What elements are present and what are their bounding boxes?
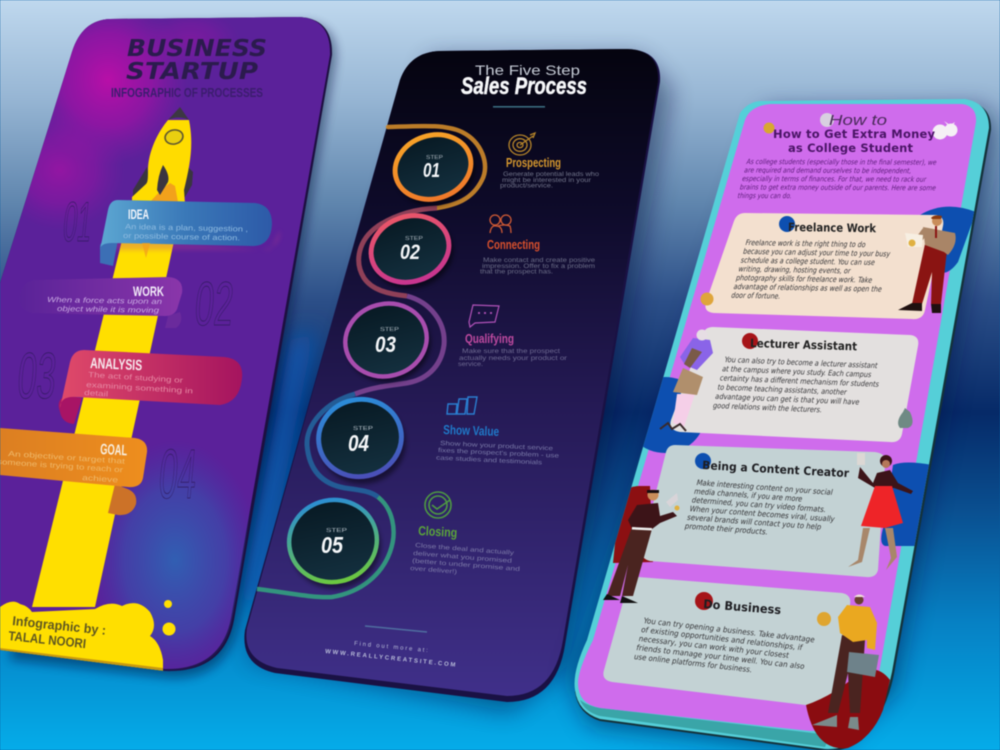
intro paragraph: As college students (especially those in the final semester), we [745,157,938,167]
icon: cloud lower edge [0,648,163,672]
freelance body text: door of fortune. [730,291,782,301]
ribbon: goal: GOAL [100,441,128,459]
lecturer body text: You can also try to become a lecturer assistant [723,355,879,370]
title: The Five Step [475,62,580,78]
prospecting text: Generate potential leads who [503,171,600,178]
show value text [436,422,560,466]
freelance body text: because you can adjust your time to your busy [742,247,892,258]
connector ribbon red [359,208,437,296]
numeral 01: 01 [60,190,95,253]
title rule [493,106,545,108]
credit: TALAL NOORI [8,628,87,651]
card: do business [603,577,850,707]
heading: being a content creator: Being a Content Creator [702,458,850,480]
numeral 03: 03 [15,339,59,412]
step 03: 03 [375,332,396,357]
intro paragraph: especially in terms of finances. For that, we need to rack our [741,174,927,184]
closing text [410,523,521,576]
figure: creator man [603,490,680,603]
do business body text: necessary, you can work with your closest [638,634,790,660]
ribbon: analysis [59,350,242,424]
ribbon: goal: achieve [82,473,118,484]
show value text: Show how your product service [440,440,554,452]
show value text: fixes the prospect's problem - use [438,447,560,460]
icon: smoke cloud [0,602,163,671]
prospecting text: product/service. [500,182,553,190]
ribbon: idea: An idea is a plan, suggestion , [125,222,248,234]
step 04: 04 [348,430,369,456]
connecting text: that the prospect has. [480,268,553,276]
qualifying text: Qualifying [465,331,514,346]
creator body text [684,478,843,541]
card: content creator [641,445,886,577]
connecting text: Connecting [487,237,540,252]
connector ribbon purple [355,296,444,394]
card: freelance work [705,213,943,319]
title: INFOGRAPHIC OF PROCESSES [111,85,263,100]
step 02: 02 [400,241,420,264]
magenta texture [24,18,226,220]
icon: money bag [898,408,913,428]
do business body text: of existing opportunities and relationships, if [640,625,804,652]
icon: money bags [932,121,958,140]
ribbon: analysis: examining something in [86,380,193,396]
freelance body text: advantage of relationships as well as open the [733,282,883,294]
step 03 [337,295,439,392]
title [111,36,267,100]
prospecting text [500,155,600,190]
freelance body text: Freelance work is the right thing to do [744,238,867,249]
figure: businessman [812,594,879,730]
ribbon: work: When a force acts upon an [47,295,162,306]
icon: bars chart [447,397,477,414]
lecturer body text [711,355,885,416]
numeral 02: 02 [192,270,236,339]
qualifying text: actually needs your product or [459,355,567,362]
lecturer body text: advantage you can get is that you will have [714,392,861,407]
lecturer body text: certainty has a different mechanism for students [719,374,880,389]
closing text: over deliver!) [410,565,457,576]
blue blob right [881,462,932,546]
icon: coin [764,122,774,134]
ribbon: idea [100,200,280,266]
ribbon: work [20,277,182,328]
freelance body text: writing, drawing, hosting events, or [737,265,852,275]
closing text: Closing [418,523,458,540]
intro paragraph [737,157,944,201]
icon: chat bubble [469,305,499,327]
icon: coin [817,612,831,626]
ribbon: idea: IDEA [128,206,149,222]
heading: how to get extra money: How to [829,112,887,129]
lecturer body text: good relations with the lecturers. [712,401,823,414]
heading: lecturer assistant: Lecturer Assistant [750,336,858,353]
blue blob top right [920,207,976,273]
ribbon: work: object while it is moving [57,304,160,315]
icon: coin [700,292,714,306]
closing text: (better to under promise and [412,558,521,573]
intro paragraph: brains to get extra money outside of our parents. Here are some [739,183,938,192]
do business body text: friends to manage your time well. You can also [635,643,806,671]
red blob left [613,486,653,563]
creator body text: several brands will contact you to help [686,513,823,532]
ribbon: goal: An objective or target that [8,449,126,466]
creator body text: determined, you can try video formats. [691,496,827,514]
do business body text: You can try opening a business. Take advantage [642,616,816,644]
creator body text: media channels, if you are more [693,487,804,504]
footer text: WWW.REALLYCREATSITE.COM [325,649,456,669]
show value text: Show Value [443,422,499,439]
step 04: STEP [353,426,373,432]
do business body text: use online platforms for business. [633,652,753,674]
qualifying text [458,331,567,368]
heading: freelance work [779,216,876,235]
step 03: STEP [380,327,399,333]
ribbon: goal [0,428,147,515]
title: Sales Process [461,73,587,100]
connecting text [480,237,596,276]
red blob bottom right [806,669,890,748]
qualifying text: Make sure that the prospect [462,348,560,355]
credit [8,616,106,649]
blue reflection between phones [240,330,315,600]
title: STARTUP [126,59,258,85]
step 04 [311,392,413,492]
heading: how to get extra money: as College Student [788,141,914,155]
step 01: 01 [423,160,440,182]
qualifying text: service. [458,361,483,368]
freelance body text: photography skills for freelance work. Take [735,273,874,285]
step 05: STEP [326,528,347,534]
icon: target [509,133,535,155]
icon: rocket [132,107,193,204]
step 02 [362,206,462,299]
panel: extra money phone [570,99,995,750]
connecting text: Make contact and create positive [483,257,596,264]
pink inner panel [578,104,976,731]
intro paragraph: are required and demand ourselves to be independent, [743,166,913,175]
closing text: Close the deal and actually [415,542,515,557]
connector ribbon blue [307,394,378,497]
heading: how to get extra money: How to Get Extra Money [773,127,936,141]
bottom teal band shade [580,700,830,747]
creator body text: promote their products. [684,522,769,537]
step 01 [387,125,484,216]
panel: business startup phone [0,0,336,680]
step 05 [281,492,389,597]
freelance body text: schedule as a college student. You can use [740,256,876,267]
footer rule [365,626,427,632]
lecturer body text: to become teaching assistants, another [717,383,849,397]
rocket exhaust beam [32,232,176,607]
figure: lecturer woman [660,330,713,431]
figure: freelance man [898,215,956,313]
intro paragraph: things you can do. [737,191,793,200]
ribbon: work: WORK [133,283,164,299]
do business body text [632,616,816,680]
prospecting text: might be interested in your [502,177,591,184]
blue blob left [642,376,701,454]
credit: Infographic by : [12,613,107,638]
creator body text: When your content becomes viral, usually [688,504,836,524]
panel: sales process phone [244,49,672,712]
title [461,62,587,100]
dots [162,600,176,636]
ribbon: analysis: The act of studying or [88,370,184,385]
heading: do business [695,592,782,617]
freelance body text [730,238,895,302]
prospecting text: Prospecting [506,155,561,170]
numeral 04: 04 [156,435,200,513]
ribbon: analysis: ANALYSIS [90,355,143,374]
step 02: STEP [405,236,423,242]
closing text: deliver what you promised [413,550,513,565]
ribbon: idea: or possible course of action. [123,231,240,242]
blue texture [104,460,249,671]
title: BUSINESS [127,36,267,62]
heading: freelance work: Freelance Work [788,220,876,235]
icon: people [490,215,511,233]
creator body text: Make interesting content on your social [695,478,834,497]
step 01: STEP [426,155,443,161]
step 05: 05 [321,532,344,558]
show value text: case studies and testimonials [436,455,542,466]
footer text: Find out more at: [354,641,428,654]
icon: check badge [425,492,451,518]
connector ribbon orange [388,126,485,208]
card: lecturer assistant [670,327,918,442]
heading: do business: Do Business [703,597,782,617]
heading: how to get extra money [773,112,936,155]
figure: creator woman [848,453,913,570]
connector ribbon green [257,497,394,597]
connecting text: impression. Offer to fix a problem [482,263,595,270]
ribbon: analysis: detail [84,388,109,398]
lecturer body text: at the campus where you study. Each campus [721,364,872,379]
